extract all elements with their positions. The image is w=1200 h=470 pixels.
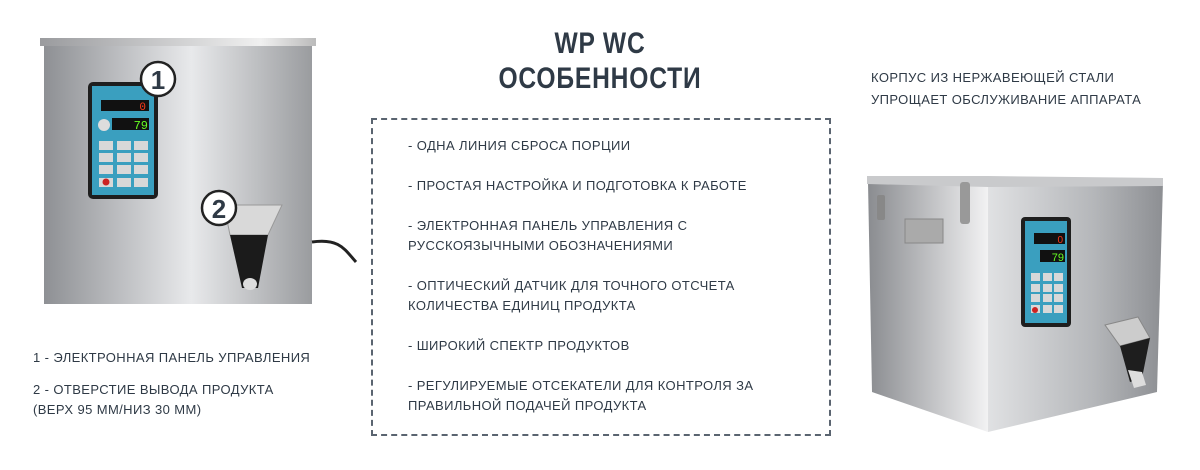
title: ОСОБЕННОСТИ <box>498 62 702 95</box>
features box: - ШИРОКИЙ СПЕКТР ПРОДУКТОВ <box>408 338 630 353</box>
control panel <box>88 82 158 199</box>
features box <box>371 118 831 436</box>
marker 2: 2 <box>212 194 226 224</box>
features box: КОЛИЧЕСТВА ЕДИНИЦ ПРОДУКТА <box>408 298 636 313</box>
right caption: УПРОЩАЕТ ОБСЛУЖИВАНИЕ АППАРАТА <box>871 92 1141 107</box>
right machine image <box>867 176 1163 432</box>
text: 1 - ЭЛЕКТРОННАЯ ПАНЕЛЬ УПРАВЛЕНИЯ <box>33 350 310 365</box>
right caption <box>871 70 1141 107</box>
text: (ВЕРХ 95 ММ/НИЗ 30 ММ) <box>33 402 201 417</box>
text: 2 - ОТВЕРСТИЕ ВЫВОДА ПРОДУКТА <box>33 382 274 397</box>
features box: - ЭЛЕКТРОННАЯ ПАНЕЛЬ УПРАВЛЕНИЯ С <box>408 218 687 233</box>
marker 2 <box>202 191 236 225</box>
features box: - РЕГУЛИРУЕМЫЕ ОТСЕКАТЕЛИ ДЛЯ КОНТРОЛЯ ЗА <box>408 378 753 393</box>
control panel: 79 <box>134 119 148 133</box>
right caption: КОРПУС ИЗ НЕРЖАВЕЮЩЕЙ СТАЛИ <box>871 70 1114 85</box>
features box: - ОДНА ЛИНИЯ СБРОСА ПОРЦИИ <box>408 138 630 153</box>
right machine image: 0 <box>1057 235 1063 246</box>
title: WP WC <box>554 27 646 60</box>
features box: РУССКОЯЗЫЧНЫМИ ОБОЗНАЧЕНИЯМИ <box>408 238 673 253</box>
features box: - ОПТИЧЕСКИЙ ДАТЧИК ДЛЯ ТОЧНОГО ОТСЧЕТА <box>408 278 735 293</box>
left machine image <box>40 38 357 304</box>
title <box>498 27 702 95</box>
legend <box>33 350 310 417</box>
control panel: 0 <box>139 102 146 114</box>
features box: ПРАВИЛЬНОЙ ПОДАЧЕЙ ПРОДУКТА <box>408 398 647 413</box>
machine body <box>40 38 356 304</box>
marker 1: 1 <box>151 65 165 95</box>
features box: - ПРОСТАЯ НАСТРОЙКА И ПОДГОТОВКА К РАБОТЕ <box>408 178 747 193</box>
right machine image: 79 <box>1052 252 1064 264</box>
marker 1 <box>141 62 175 96</box>
outlet chute <box>224 205 282 290</box>
